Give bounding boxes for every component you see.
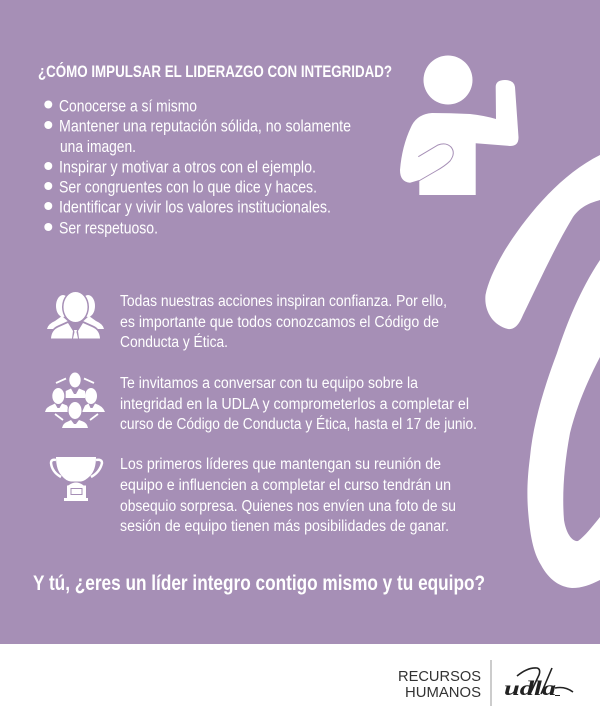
paragraph: premio: sesión de equipo tienen más posibilidades de ganar. <box>120 518 449 535</box>
bullet 2: Mantener una reputación sólida, no solamente <box>59 118 351 136</box>
bullet 3: Inspirar y motivar a otros con el ejemplo. <box>59 158 316 176</box>
paragraph: conversar: curso de Código de Conducta y Ética, hasta el 17 de junio. <box>120 416 477 433</box>
footer divider <box>490 660 492 706</box>
paragraph: premio: equipo e influencien a completar el curso tendrán un <box>120 477 451 494</box>
paragraph: confianza: es importante que todos conozcamos el Código de <box>120 314 439 331</box>
footer: udla logo: udla <box>504 676 556 700</box>
icon: team circle <box>45 372 105 428</box>
footer: recursos humanos label <box>398 669 481 701</box>
heading: ¿CÓMO IMPULSAR EL LIDERAZGO CON INTEGRIDAD? <box>38 62 392 81</box>
paragraph: premio: obsequio sorpresa. Quienes nos envíen una foto de su <box>120 498 456 515</box>
bullet 1: Conocerse a sí mismo <box>59 98 197 116</box>
footer: udla logo <box>504 668 573 700</box>
bullet 4: Ser congruentes con lo que dice y haces. <box>59 178 317 196</box>
decorative white swirl <box>485 155 600 588</box>
icon: trophy <box>51 457 102 501</box>
paragraph: confianza <box>120 293 447 351</box>
paragraph: premio <box>120 456 456 535</box>
paragraph: conversar: integridad en la UDLA y comprometerlos a completar el <box>120 396 469 413</box>
icon: person with raised hand <box>400 56 519 195</box>
footer: recursos humanos label: RECURSOS <box>398 669 481 685</box>
bullet 6: Ser respetuoso. <box>59 220 158 238</box>
paragraph: conversar: Te invitamos a conversar con tu equipo sobre la <box>120 375 418 392</box>
bullet 2: una imagen. <box>60 138 136 156</box>
closing question: Y tú, ¿eres un líder integro contigo mismo y tu equipo? <box>33 572 485 595</box>
bullet 2 <box>44 118 351 156</box>
bullet list <box>44 98 351 238</box>
paragraph: premio: Los primeros líderes que mantengan su reunión de <box>120 456 441 473</box>
bullet 5: Identificar y vivir los valores institucionales. <box>59 198 331 216</box>
paragraph: conversar <box>120 375 477 433</box>
paragraph: confianza: Conducta y Ética. <box>120 334 228 351</box>
paragraph: confianza: Todas nuestras acciones inspiran confianza. Por ello, <box>120 293 447 310</box>
icon: business people <box>47 290 104 340</box>
footer: recursos humanos label: HUMANOS <box>405 685 481 701</box>
